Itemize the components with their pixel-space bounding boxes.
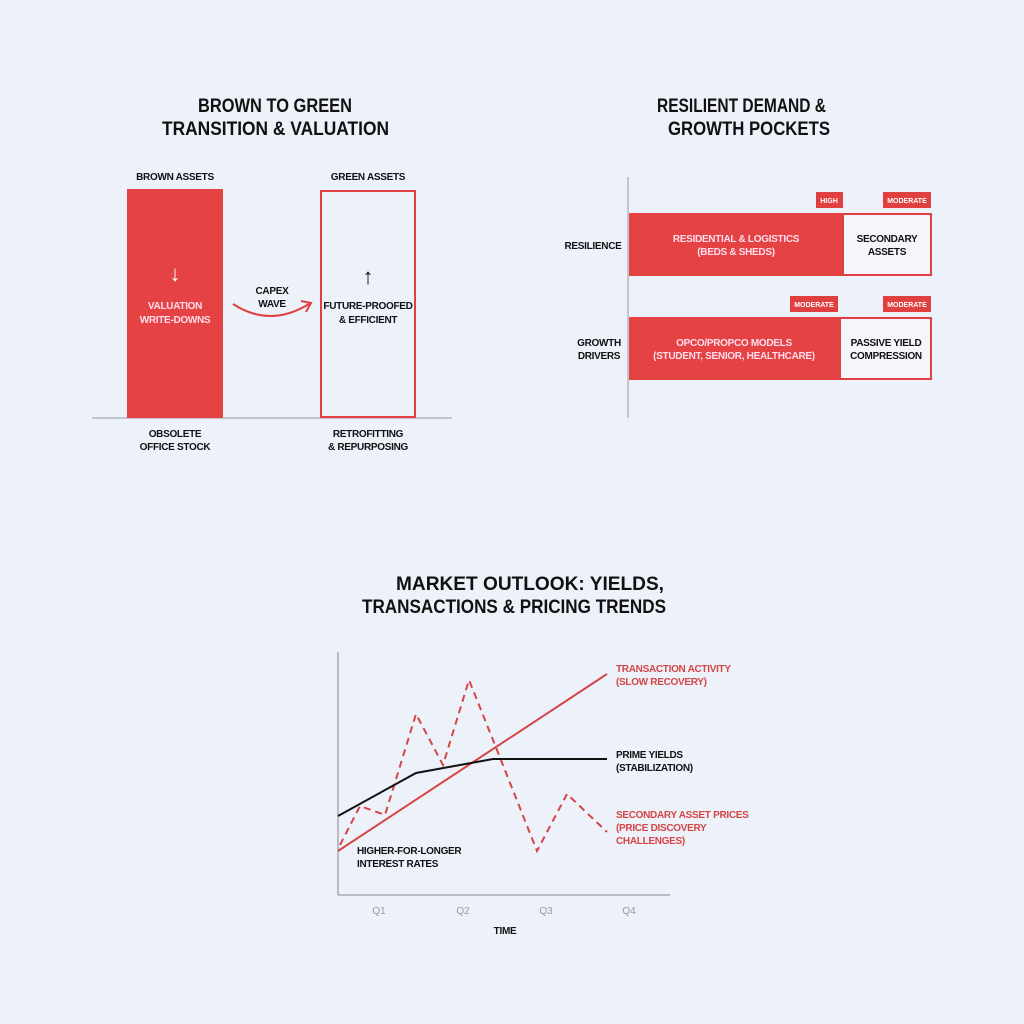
title: brown to green: [162, 96, 389, 140]
green assets bar: & REPURPOSING: [328, 442, 409, 453]
row: growth drivers: OPCO/PROPCO MODELS: [676, 338, 792, 349]
line chart: INTEREST RATES: [357, 859, 439, 870]
title: resilient demand: GROWTH POCKETS: [668, 119, 830, 140]
title: resilient demand: RESILIENT DEMAND &: [657, 96, 826, 117]
row: growth drivers: PASSIVE YIELD: [851, 338, 921, 349]
line chart: Q2: [456, 906, 470, 917]
panel: market outlook: [338, 574, 749, 937]
brown assets bar: VALUATION: [148, 301, 202, 312]
title: market outlook: MARKET OUTLOOK: YIELDS,: [396, 574, 664, 595]
arrow: capex wave: [233, 286, 311, 316]
line chart: Q3: [539, 906, 553, 917]
green assets bar: FUTURE-PROOFED: [323, 301, 413, 312]
line chart: CHALLENGES): [616, 836, 685, 847]
row: resilience: MODERATE: [887, 198, 927, 205]
line chart: SECONDARY ASSET PRICES: [616, 810, 749, 821]
row: growth drivers: COMPRESSION: [850, 351, 922, 362]
brown assets bar: BROWN ASSETS: [136, 172, 214, 183]
line chart: (STABILIZATION): [616, 763, 693, 774]
row: resilience: [564, 192, 931, 276]
green assets bar: RETROFITTING: [333, 429, 404, 440]
green assets bar: & EFFICIENT: [339, 315, 397, 326]
green assets bar: ↑: [362, 264, 374, 289]
row: resilience: ASSETS: [868, 247, 907, 258]
row: growth drivers: DRIVERS: [578, 351, 621, 362]
green assets bar: GREEN ASSETS: [331, 172, 406, 183]
brown assets bar: [127, 172, 223, 453]
line chart: PRIME YIELDS: [616, 750, 683, 761]
line chart: (SLOW RECOVERY): [616, 677, 707, 688]
row: growth drivers: MODERATE: [887, 302, 927, 309]
row: resilience: SECONDARY: [857, 234, 918, 245]
line chart: Q1: [372, 906, 386, 917]
arrow: capex wave: CAPEX: [256, 286, 289, 297]
line chart: TRANSACTION ACTIVITY: [616, 664, 731, 675]
arrow: capex wave: WAVE: [258, 299, 286, 310]
row: resilience: (BEDS & SHEDS): [697, 247, 775, 258]
brown assets bar: ↓: [170, 261, 180, 286]
title: brown to green: TRANSITION & VALUATION: [162, 119, 389, 140]
brown assets bar: OBSOLETE: [149, 429, 202, 440]
row: growth drivers: GROWTH: [577, 338, 621, 349]
row: resilience: HIGH: [820, 198, 838, 205]
row: growth drivers: [577, 296, 931, 380]
line chart: Q4: [622, 906, 636, 917]
line chart: [338, 652, 749, 937]
panel: resilient demand: [564, 96, 931, 418]
title: market outlook: TRANSACTIONS & PRICING TRENDS: [362, 597, 666, 618]
row: resilience: RESIDENTIAL & LOGISTICS: [673, 234, 800, 245]
title: market outlook: [362, 574, 666, 618]
line chart: HIGHER-FOR-LONGER: [357, 846, 462, 857]
row: growth drivers: MODERATE: [794, 302, 834, 309]
panel: brown to green: [92, 96, 452, 453]
title: brown to green: BROWN TO GREEN: [198, 96, 352, 117]
line chart: TIME: [494, 926, 517, 937]
line chart: (PRICE DISCOVERY: [616, 823, 707, 834]
title: resilient demand: [657, 96, 830, 140]
row: resilience: RESILIENCE: [564, 241, 622, 252]
green assets bar: [321, 172, 415, 453]
row: growth drivers: (STUDENT, SENIOR, HEALTHCARE): [653, 351, 815, 362]
brown assets bar: OFFICE STOCK: [140, 442, 211, 453]
brown assets bar: WRITE-DOWNS: [140, 315, 211, 326]
